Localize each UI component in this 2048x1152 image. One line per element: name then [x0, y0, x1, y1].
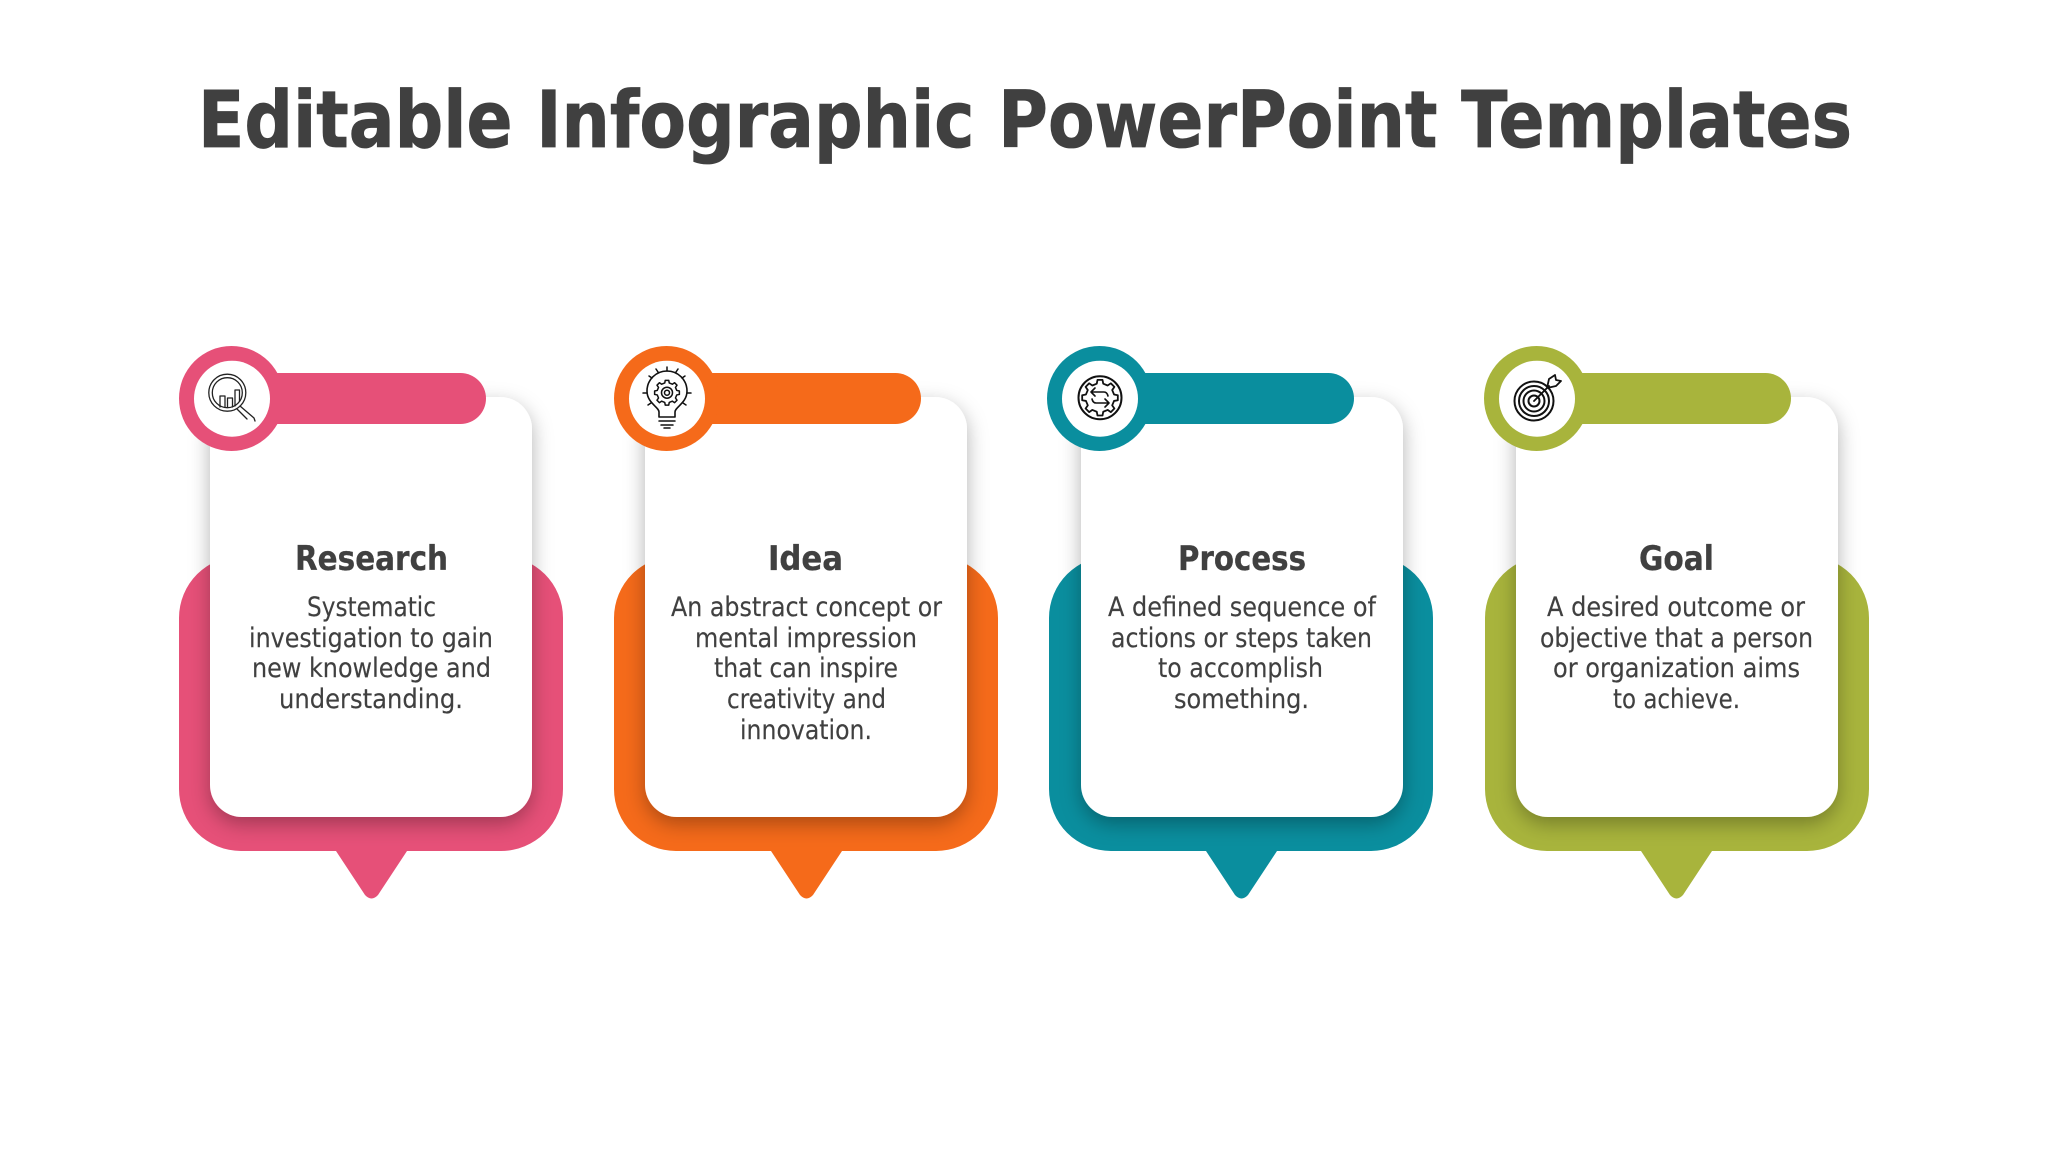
description: to achieve. [1613, 684, 1740, 715]
header bar [231, 373, 486, 424]
icon disc [1499, 361, 1575, 437]
icon ring [1484, 346, 1589, 451]
description [1540, 592, 1813, 715]
description: understanding. [279, 684, 463, 715]
title: Editable Infographic PowerPoint Templates [198, 76, 1852, 166]
icon: light bulb with gear [643, 367, 691, 428]
description: investigation to gain [249, 623, 493, 654]
description: that can inspire [714, 653, 898, 684]
white card [210, 397, 532, 817]
description: or organization aims [1553, 653, 1800, 684]
panel: goal [1484, 346, 1869, 898]
icon: magnifier with bars [209, 374, 255, 421]
panel: process [1047, 346, 1433, 898]
heading: Idea [768, 539, 843, 579]
panel: research [179, 346, 563, 898]
description: actions or steps taken [1111, 623, 1372, 654]
coloured speech-bubble backing [1485, 556, 1869, 898]
heading: Process [1178, 539, 1306, 579]
coloured speech-bubble backing [614, 556, 998, 898]
white card [645, 397, 967, 817]
description: An abstract concept or [671, 592, 942, 623]
description: mental impression [695, 623, 917, 654]
icon ring [1047, 346, 1152, 451]
description: something. [1174, 684, 1309, 715]
icon disc [1062, 361, 1138, 437]
description: Systematic [307, 592, 436, 623]
coloured speech-bubble backing [1049, 556, 1433, 898]
white card [1516, 397, 1838, 817]
description: objective that a person [1540, 623, 1813, 654]
icon: target with arrow [1514, 375, 1561, 420]
heading: Research [295, 539, 448, 579]
heading: Goal [1639, 539, 1714, 579]
description: new knowledge and [252, 653, 491, 684]
icon ring [614, 346, 719, 451]
header bar [666, 373, 921, 424]
icon ring [179, 346, 284, 451]
description: to accomplish [1158, 653, 1323, 684]
header bar [1536, 373, 1791, 424]
header bar [1099, 373, 1354, 424]
description [671, 592, 942, 746]
coloured speech-bubble backing [179, 556, 563, 898]
description [249, 592, 493, 715]
icon disc [194, 361, 270, 437]
icon: gear with cycle arrows [1078, 376, 1122, 419]
panel: idea [614, 346, 998, 898]
description [1108, 592, 1377, 715]
white card [1081, 397, 1403, 817]
description: A desired outcome or [1547, 592, 1805, 623]
description: A defined sequence of [1108, 592, 1377, 623]
description: creativity and [727, 684, 886, 715]
icon disc [629, 361, 705, 437]
description: innovation. [740, 715, 872, 746]
